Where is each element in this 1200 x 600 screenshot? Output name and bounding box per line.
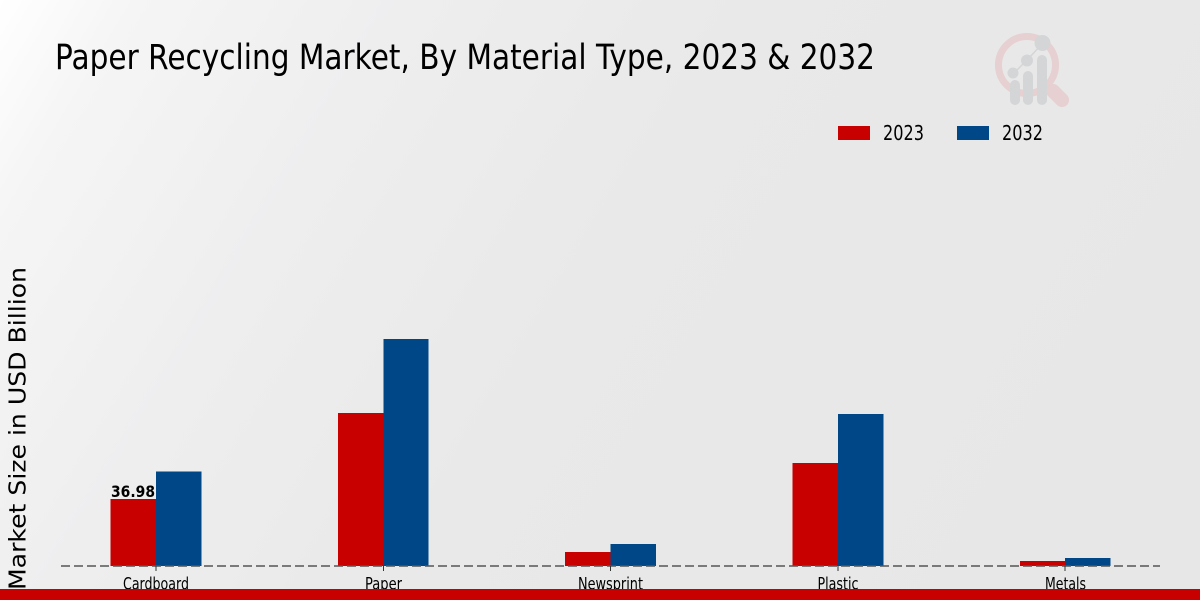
category labels: Metals [1045,574,1086,594]
legend item: 2032: 2032 [1002,121,1043,145]
bottom red band [0,589,1200,600]
data label: 36.98: 36.98 [111,482,155,501]
group: Plastic [792,414,884,566]
category labels: Cardboard [123,574,189,594]
legend item: 2023 [838,121,924,145]
category labels: Newsprint [578,574,643,594]
bar chart [61,339,1160,594]
legend item: 2032 [957,121,1043,145]
category labels [123,574,1086,594]
y axis label: Market Size in USD Billion [6,267,32,590]
group: Metals [1020,558,1110,566]
legend [838,121,1043,145]
icon: magnifier logo [998,35,1062,105]
legend item: 2023: 2023 [883,121,924,145]
baseline [61,565,1160,567]
category labels: Plastic [818,574,858,594]
group: Cardboard [110,472,202,566]
title: Paper Recycling Market, By Material Type, 2023 & 2032 [55,38,875,78]
group: Paper [338,339,428,566]
category labels: Paper [365,574,402,594]
group: Newsprint [565,544,656,566]
